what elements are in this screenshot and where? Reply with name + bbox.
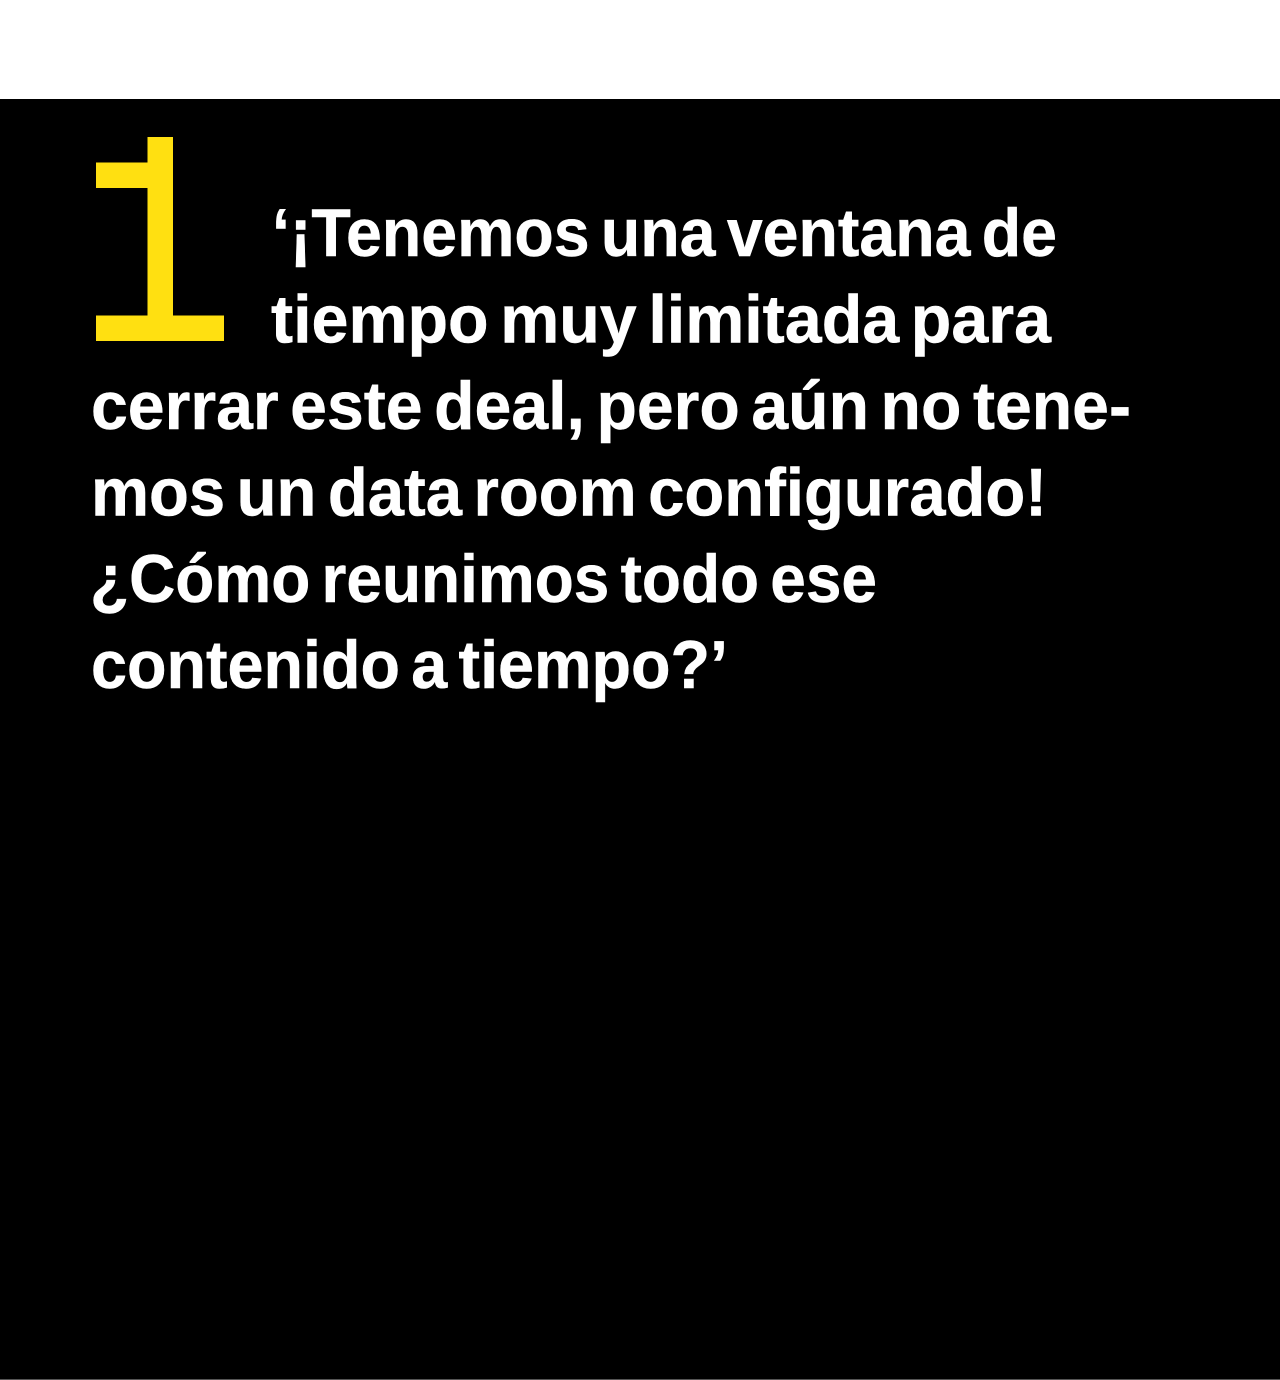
text block: quote: contenido a tiempo?’: [91, 627, 728, 703]
bottom edge line: [0, 1379, 1280, 1380]
text block: quote: tiempo muy limitada para: [271, 282, 1052, 358]
text block: quote: cerrar este deal, pero aún no tene-: [91, 368, 1131, 444]
icon: yellow numeral 1: [96, 137, 224, 341]
text block: quote: ¿Cómo reunimos todo ese: [90, 541, 877, 617]
text block: quote: mos un data room configurado!: [91, 454, 1047, 530]
text block: quote: [90, 195, 1131, 703]
text block: quote: ‘¡Tenemos una ventana de: [272, 195, 1057, 271]
